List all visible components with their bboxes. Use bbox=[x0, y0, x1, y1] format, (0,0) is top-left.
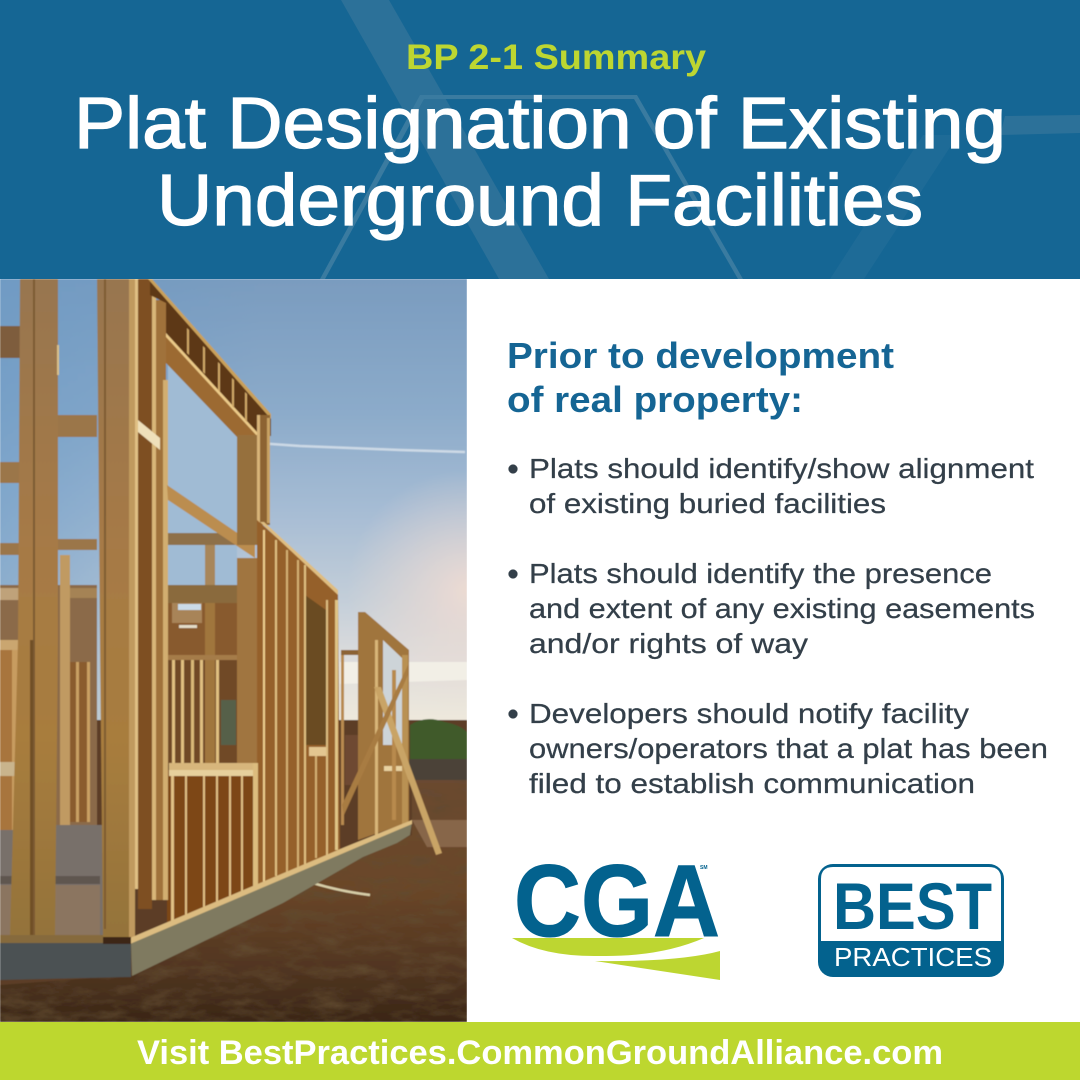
right panel heading: of real property: bbox=[507, 379, 803, 420]
right panel heading bbox=[507, 335, 894, 420]
distant trees and ground bbox=[0, 718, 467, 986]
CGA logo: CGA bbox=[514, 844, 720, 958]
Best Practices badge: BEST bbox=[833, 869, 992, 943]
soil foreground bbox=[0, 780, 467, 1022]
bullet 2: and/or rights of way bbox=[529, 628, 808, 659]
Best Practices badge bbox=[818, 864, 1004, 977]
header band bbox=[0, 0, 1080, 279]
bullet 1: Plats should identify/show alignment bbox=[529, 453, 1034, 484]
title: Underground Facilities bbox=[157, 161, 923, 241]
main post bbox=[97, 279, 168, 939]
bullet 3: owners/operators that a plat has been bbox=[529, 733, 1048, 764]
bullet list bbox=[508, 453, 1048, 799]
bullet 2 bbox=[508, 558, 1035, 659]
horizontal stubs between posts bbox=[0, 326, 97, 555]
bullet 2: and extent of any existing easements bbox=[529, 593, 1035, 624]
Best Practices badge: PRACTICES bbox=[834, 942, 992, 972]
bullet 3 bbox=[508, 698, 1048, 799]
title: Plat Designation of Existing bbox=[74, 84, 1006, 164]
photo: timber house framing at a construction site bbox=[0, 279, 467, 1022]
bullet 1 bbox=[508, 453, 1034, 519]
interior floor bbox=[0, 824, 104, 936]
window opening view bbox=[168, 363, 238, 765]
bullet 3: filed to establish communication bbox=[529, 768, 975, 799]
concrete foundation bbox=[0, 820, 412, 980]
right edge window stud bbox=[236, 414, 271, 764]
top window header and cripple studs bbox=[148, 279, 271, 437]
background framing behind the openings bbox=[0, 555, 97, 830]
windowsill and studs below bbox=[169, 763, 258, 922]
cross brace bbox=[167, 485, 255, 558]
right panel heading: Prior to development bbox=[507, 335, 894, 376]
bullet 1: of existing buried facilities bbox=[529, 488, 886, 519]
bullet 3: Developers should notify facility bbox=[529, 698, 969, 729]
boards below the sill bbox=[167, 770, 257, 926]
footer band with website bbox=[0, 1022, 1080, 1080]
footer band with website: Visit BestPractices.CommonGroundAlliance.com bbox=[137, 1034, 943, 1072]
subtitle: BP 2-1 Summary bbox=[406, 38, 707, 77]
far wall frame bbox=[341, 612, 442, 855]
bullet 2: Plats should identify the presence bbox=[529, 558, 992, 589]
CGA logo: SM bbox=[700, 865, 708, 871]
sky bbox=[0, 279, 467, 724]
second wall section bbox=[257, 520, 340, 886]
left post bbox=[10, 279, 59, 935]
title bbox=[74, 84, 1006, 241]
